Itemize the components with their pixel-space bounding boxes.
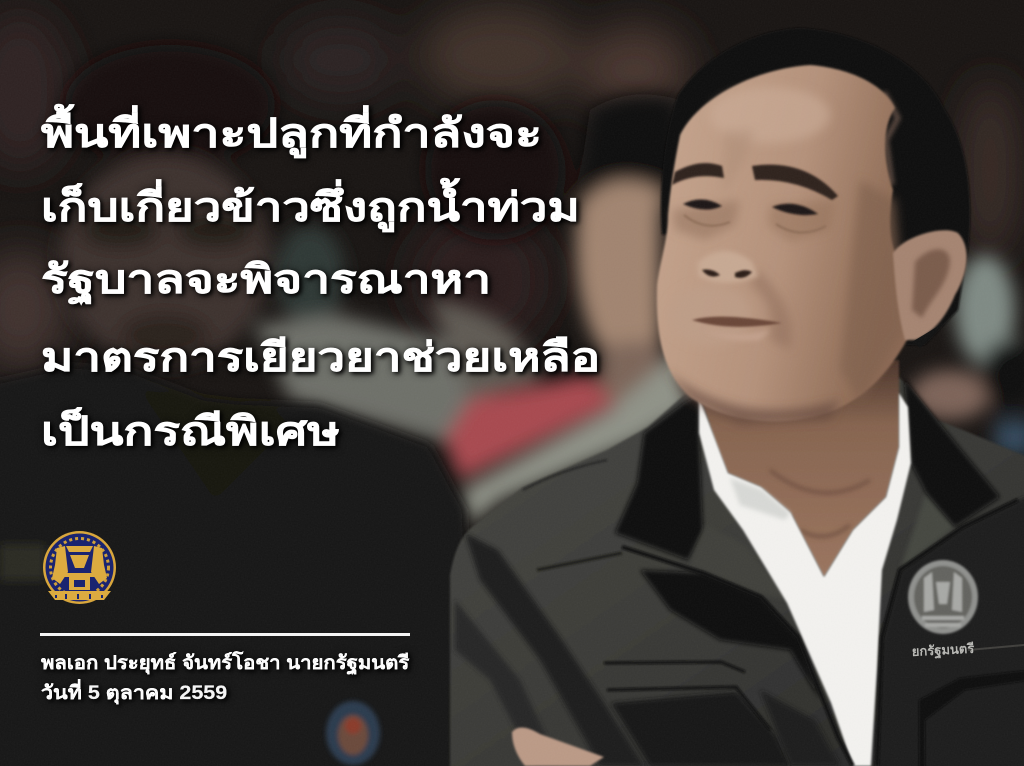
zipper lines <box>622 547 853 766</box>
attribution name: พลเอก ประยุทธ์ จันทร์โอชา นายกรัฐมนตรี <box>41 653 409 674</box>
hair <box>661 28 970 345</box>
nose <box>698 251 758 283</box>
hair strands at receding temple <box>884 92 898 185</box>
divider line <box>40 633 410 636</box>
brows <box>672 163 724 185</box>
jacket seal <box>908 560 978 634</box>
white shirt <box>699 393 911 766</box>
headline line 2: เก็บเกี่ยวข้าวซึ่งถูกน้ำท่วม <box>41 186 580 230</box>
lower dark panel <box>611 692 790 766</box>
right background <box>955 255 1015 365</box>
headline line 1: พื้นที่เพาะปลูกที่กำลังจะ <box>41 112 542 156</box>
right black collar <box>904 378 1000 527</box>
right chest panel <box>875 495 1024 766</box>
subject jacket: ยกรัฐมนตรี <box>911 641 975 661</box>
head <box>657 28 970 425</box>
headline line 3: รัฐบาลจะพิจารณาหา <box>41 258 491 302</box>
person behind: dark hair <box>425 100 565 240</box>
eyes <box>683 199 722 210</box>
badge on shirt <box>326 701 380 765</box>
pocket seams <box>604 662 770 730</box>
background crowd <box>0 5 1020 370</box>
neck <box>695 360 899 577</box>
hand <box>512 727 604 766</box>
logo: government seal <box>43 531 116 604</box>
headline line 5: เป็นกรณีพิเศษ <box>41 410 340 454</box>
attribution date: วันที่ 5 ตุลาคม 2559 <box>41 683 227 704</box>
person left: hair and dim face <box>65 45 275 165</box>
mouth <box>692 317 782 327</box>
face <box>657 65 912 421</box>
left black collar <box>615 395 703 560</box>
ear <box>893 230 967 340</box>
face shading <box>665 87 905 425</box>
chest dark fold <box>640 570 820 700</box>
left sleeve shadows <box>465 533 644 766</box>
pink garment <box>445 375 615 480</box>
headline line 4: มาตรการเยียวยาช่วยเหลือ <box>41 336 600 380</box>
subject jacket <box>450 360 1024 766</box>
man in dark shirt <box>0 365 475 766</box>
teal patch and grey clothing <box>275 225 345 325</box>
hair under ear <box>912 322 945 348</box>
grey garment <box>462 350 690 525</box>
woman behind <box>575 94 680 210</box>
